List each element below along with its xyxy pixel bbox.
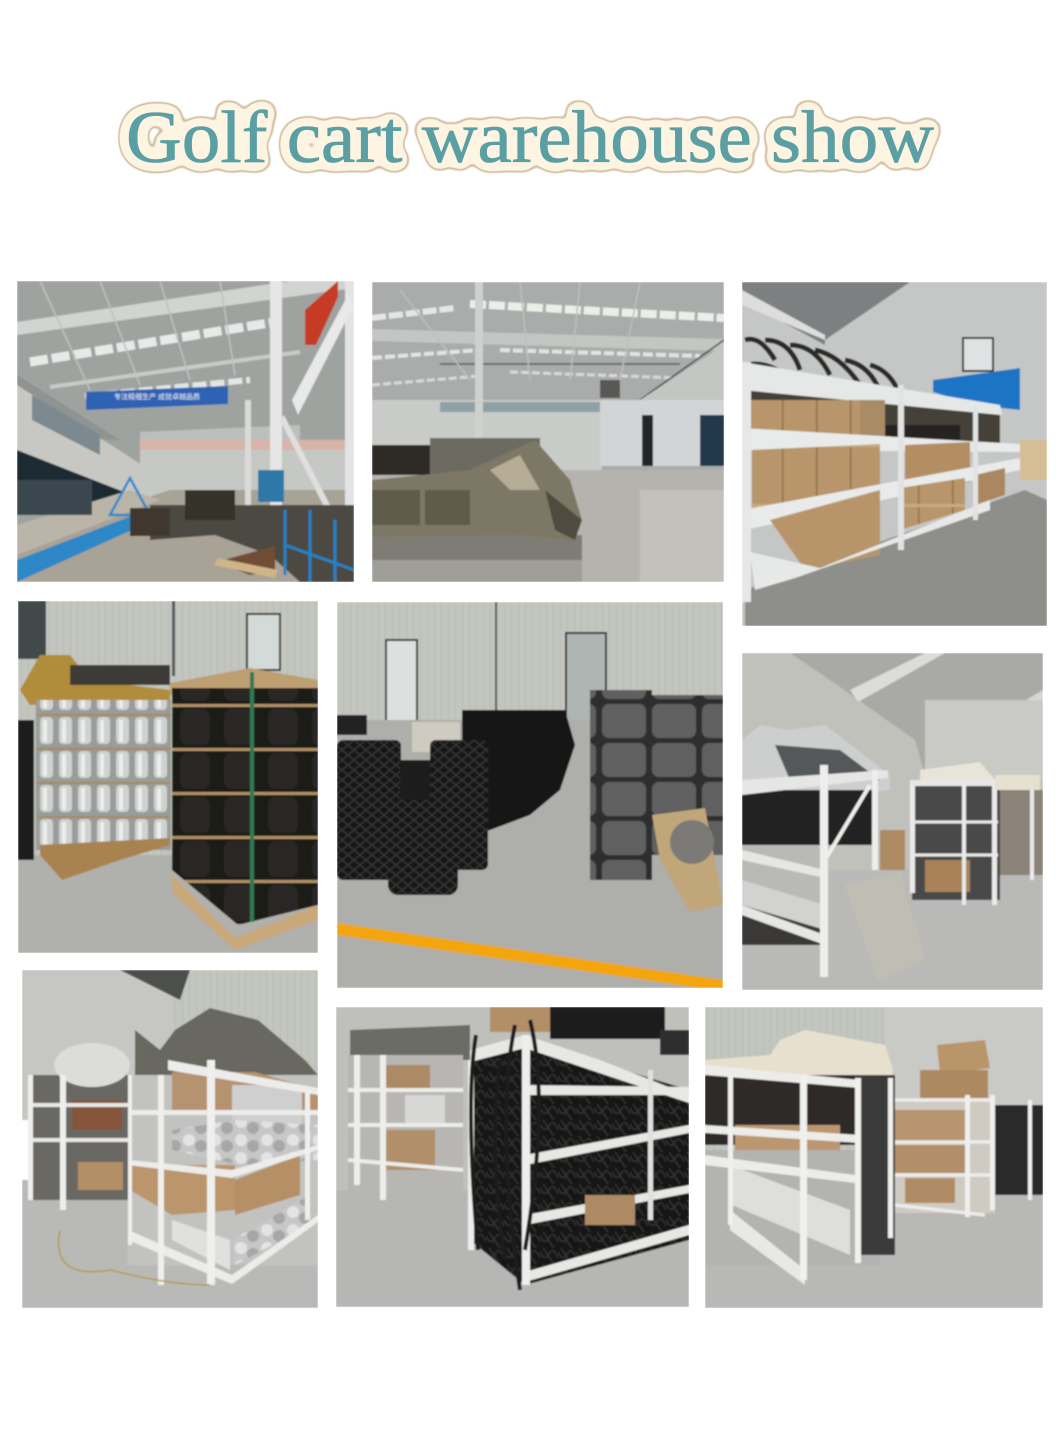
production line racks and machines xyxy=(17,470,354,582)
top cart frames xyxy=(745,339,900,395)
window xyxy=(963,338,993,371)
panel: rack with seat trays photo xyxy=(22,970,318,1308)
rear rack xyxy=(28,1043,130,1210)
harness rack xyxy=(468,1035,689,1285)
floor xyxy=(745,490,1047,626)
black rim pallet xyxy=(170,668,318,950)
white columns and bracing xyxy=(245,281,354,561)
panel: tires stacked in warehouse photo xyxy=(337,602,723,988)
panel: stacked wheel rims photo xyxy=(18,601,318,953)
floor xyxy=(336,1190,689,1307)
white spray room xyxy=(600,400,724,466)
roof corner xyxy=(742,282,910,345)
plastic-wrapped goods xyxy=(742,725,890,810)
shelving unit xyxy=(742,362,1047,602)
seat trays xyxy=(135,1008,318,1075)
back wall and windows xyxy=(372,282,724,482)
floor cable xyxy=(59,1230,210,1285)
ceiling skylights xyxy=(372,282,724,400)
white roof canopy xyxy=(705,1030,893,1112)
golf cart bodies xyxy=(372,438,582,540)
floor xyxy=(337,720,723,988)
foreground rack xyxy=(705,1065,895,1285)
left wall with windows xyxy=(17,385,350,525)
foreground rack xyxy=(128,1060,318,1285)
floor xyxy=(22,1180,318,1308)
leaning panel xyxy=(845,872,925,980)
floor xyxy=(17,490,354,582)
rear rack xyxy=(895,1095,1043,1217)
panel: white racks with roof parts photo xyxy=(705,1007,1043,1308)
ceiling beams and skylights xyxy=(17,281,354,440)
cartons on rear rack xyxy=(920,1040,990,1100)
hanging cables xyxy=(471,1020,539,1290)
banner: 专注精细生产 成就卓越品质 xyxy=(114,392,200,401)
rear racks xyxy=(910,762,1043,905)
floor xyxy=(705,1190,1043,1308)
white sacks xyxy=(412,722,460,752)
panel: car body workshop photo xyxy=(372,282,724,582)
windows xyxy=(18,601,46,659)
silver rim pallet xyxy=(20,655,171,880)
ceiling xyxy=(790,653,1043,775)
orange floor line xyxy=(337,923,723,988)
cardboard insert xyxy=(652,808,723,912)
panel: shelves with cartons photo xyxy=(742,282,1047,626)
foreground rack xyxy=(742,765,905,977)
blue box xyxy=(933,368,1020,410)
panel: assembly workshop photo xyxy=(17,281,354,582)
title: Golf cart warehouse show: Golf cart warehouse show xyxy=(126,97,935,179)
banner xyxy=(86,386,228,410)
red crane xyxy=(305,281,338,345)
windows xyxy=(386,602,606,740)
tire stacks xyxy=(337,710,575,895)
panel: rack with wiring harnesses photo xyxy=(336,1007,689,1307)
cartons and black case on top xyxy=(490,1007,689,1055)
floor xyxy=(742,870,1043,990)
floor xyxy=(18,855,318,953)
floor xyxy=(372,470,724,582)
left rack xyxy=(348,1025,470,1200)
panel: white racks with seats photo xyxy=(742,653,1043,990)
wrapped wheel stacks xyxy=(590,690,723,880)
